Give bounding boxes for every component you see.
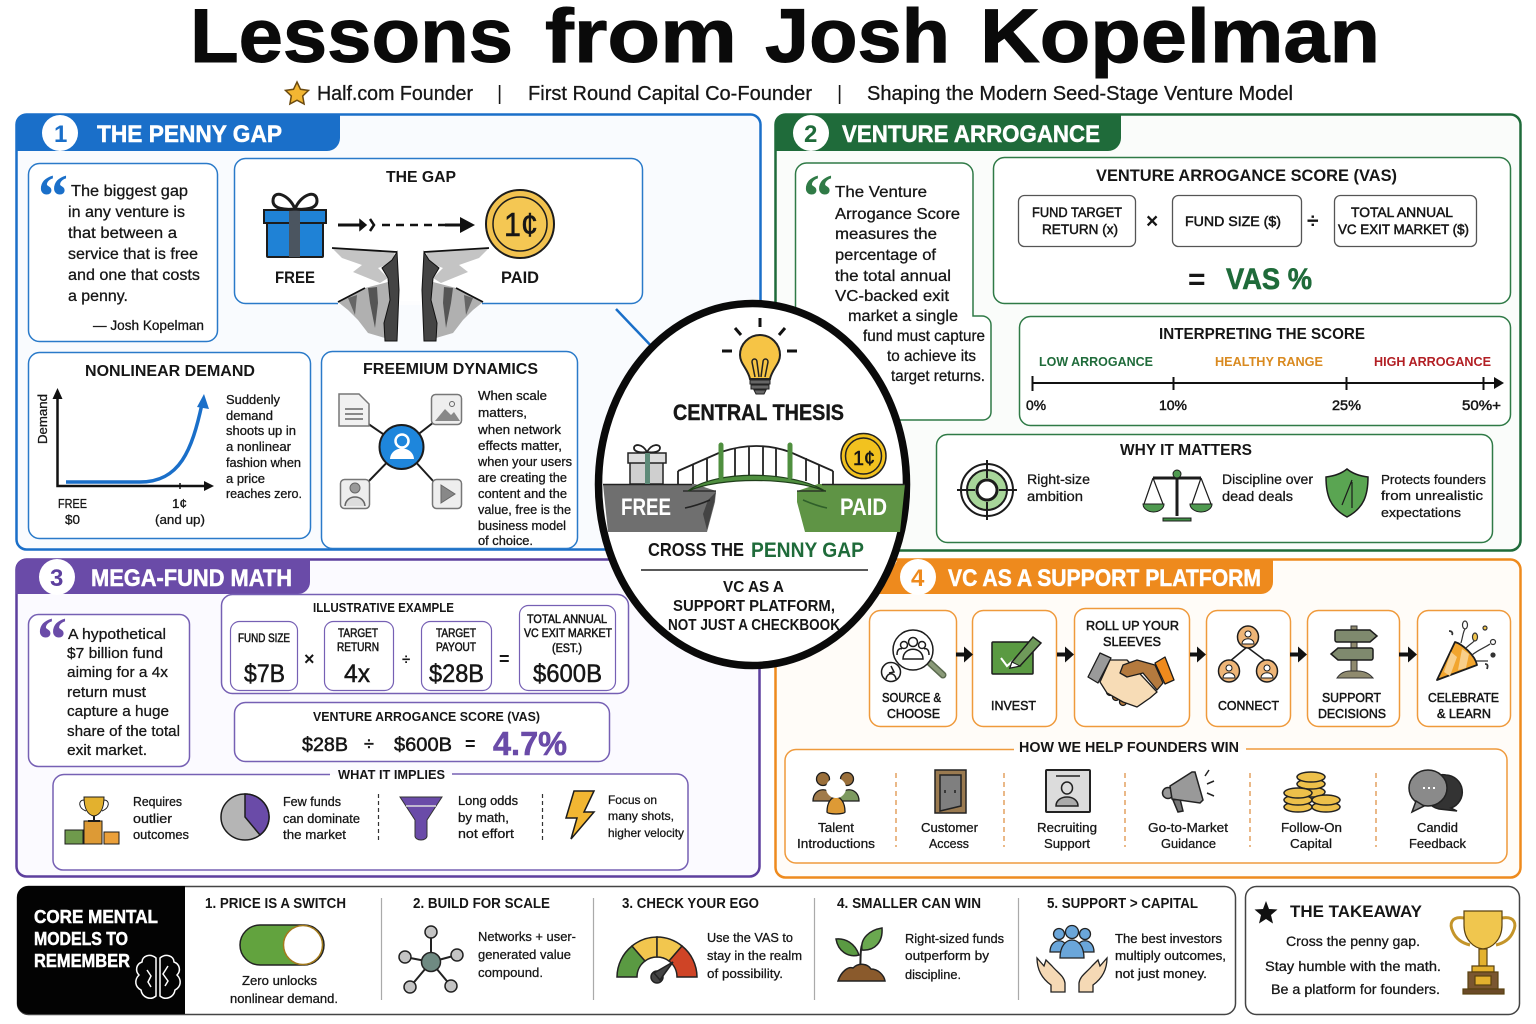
model 4: smaller can win: outperform by xyxy=(905,948,990,963)
panel: how we help founders win: Introductions xyxy=(797,836,876,851)
panel: the takeaway: THE TAKEAWAY xyxy=(1290,902,1423,921)
panel: illustrative example: TARGET xyxy=(436,628,476,640)
panel: nonlinear demand: a nonlinear xyxy=(226,440,291,454)
step: connect: CONNECT xyxy=(1218,698,1279,713)
quote: hypothetical fund: return must xyxy=(67,684,147,701)
icon: door xyxy=(935,770,966,813)
step: roll up your sleeves: ROLL UP YOUR xyxy=(1086,618,1179,633)
panel: VAS formula: RETURN (x) xyxy=(1042,222,1118,237)
panel: how we help founders win: Capital xyxy=(1290,836,1332,851)
panel: illustrative example: $28B xyxy=(429,660,484,688)
quote: hypothetical fund: share of the total xyxy=(67,723,180,740)
quote: biggest gap: in any venture is xyxy=(68,204,185,221)
heading: mega-fund math: MEGA-FUND MATH xyxy=(91,565,292,592)
diagram: network of content xyxy=(339,394,462,508)
model 4: smaller can win: 4. SMALLER CAN WIN xyxy=(837,896,981,912)
panel: VAS result: 4.7% xyxy=(493,725,567,762)
model 2: build for scale: 2. BUILD FOR SCALE xyxy=(413,896,550,912)
heading block: CORE MENTAL xyxy=(34,907,158,927)
panel: illustrative example: (EST.) xyxy=(552,643,582,655)
heading: vc as a support platform: 4 xyxy=(911,565,925,592)
quote: venture arrogance score: the total annual xyxy=(835,268,951,285)
arrows between steps xyxy=(956,646,1417,662)
model 1: price is a switch: 1. PRICE IS A SWITCH xyxy=(205,896,346,912)
step: roll up your sleeves: SLEEVES xyxy=(1103,634,1161,649)
scale axis xyxy=(1032,376,1504,391)
heading: venture arrogance: 2 xyxy=(804,121,817,148)
icon: talent group xyxy=(813,772,859,814)
model 4: smaller can win xyxy=(836,896,1004,982)
step: support decisions: DECISIONS xyxy=(1318,706,1386,721)
panel: illustrative example: TOTAL ANNUAL xyxy=(527,614,608,626)
quote: venture arrogance score: “ xyxy=(803,163,833,231)
panel: illustrative example: TARGET xyxy=(338,628,378,640)
model 3: check your ego: 3. CHECK YOUR EGO xyxy=(622,896,759,912)
panel: interpreting the score: LOW ARROGANCE xyxy=(1039,354,1153,369)
line chart: demand: 1¢ xyxy=(172,497,187,511)
panel: freemium dynamics: of choice. xyxy=(478,534,533,548)
illustration: broken cliffs xyxy=(332,248,489,341)
panel: central thesis: SUPPORT PLATFORM, xyxy=(673,598,835,615)
panel: illustrative example: $7B xyxy=(244,660,285,688)
model 5: support over capital xyxy=(1037,896,1226,992)
panel: nonlinear demand: a price xyxy=(226,472,265,486)
icon: star xyxy=(1254,901,1278,924)
panel: what it implies: Long odds xyxy=(458,794,518,808)
panel: VAS result: ÷ xyxy=(364,734,374,754)
model 2: build for scale xyxy=(399,896,576,993)
icon: coin xyxy=(486,190,554,258)
panel: why it matters: ambition xyxy=(1027,489,1083,504)
step: celebrate and learn xyxy=(1418,610,1510,726)
quote: biggest gap: that between a xyxy=(68,225,177,242)
step: invest xyxy=(972,610,1056,726)
step: celebrate and learn: & LEARN xyxy=(1437,706,1491,721)
panel: the gap: PAID xyxy=(501,269,539,287)
panel: what it implies: Requires xyxy=(133,795,182,809)
panel: interpreting the score: HIGH ARROGANCE xyxy=(1374,354,1491,369)
panel: interpreting the score xyxy=(1020,316,1510,426)
quote: venture arrogance score: percentage of xyxy=(835,247,937,264)
subtitle row: Half.com Founder xyxy=(317,83,473,105)
panel: how we help founders win: Guidance xyxy=(1161,836,1216,851)
heading: the penny gap xyxy=(16,114,340,151)
panel: what it implies: outlier xyxy=(133,812,172,826)
heading: the penny gap: 1 xyxy=(54,121,67,148)
step: source and choose: CHOOSE xyxy=(887,706,940,721)
panel: illustrative example: ILLUSTRATIVE EXAMPLE xyxy=(313,601,454,615)
panel: VAS result: $28B xyxy=(302,735,348,756)
panel: the penny gap xyxy=(16,114,760,550)
model 4: smaller can win: Right-sized funds xyxy=(905,931,1004,946)
panel: illustrative example: PAYOUT xyxy=(436,642,476,654)
panel: illustrative example: ÷ xyxy=(402,651,410,668)
quote: venture arrogance score: Arrogance Score xyxy=(835,206,960,223)
icon: people in hands xyxy=(1037,926,1107,992)
heading: the penny gap: THE PENNY GAP xyxy=(97,121,282,148)
heading block: REMEMBER xyxy=(34,951,130,971)
panel: how we help founders win: Go-to-Market xyxy=(1148,820,1228,835)
quote: hypothetical fund: “ xyxy=(37,606,67,674)
model 5: support over capital: multiply outcomes, xyxy=(1115,949,1226,963)
panel: what it implies: higher velocity xyxy=(608,826,684,840)
subtitle row: Shaping the Modern Seed-Stage Venture Model xyxy=(867,83,1293,105)
illustration: bridge over the gap: FREE xyxy=(621,494,671,521)
connector to central thesis xyxy=(616,309,655,350)
panel: core mental models xyxy=(17,886,1236,1014)
panel: why it matters xyxy=(936,434,1492,542)
quote continuation: venture arrogance score xyxy=(848,308,985,385)
panel: illustrative example: RETURN xyxy=(337,642,379,654)
panel: freemium dynamics: FREEMIUM DYNAMICS xyxy=(363,361,538,378)
panel: VAS result xyxy=(234,702,610,762)
panel: VAS formula xyxy=(994,158,1510,304)
illustration: bridge over the gap xyxy=(603,434,905,532)
icon: speech bubbles xyxy=(1409,770,1462,812)
panel: the takeaway: Stay humble with the math. xyxy=(1265,959,1441,974)
panel: interpreting the score: 10% xyxy=(1159,397,1187,413)
model 3: check your ego: stay in the realm xyxy=(707,948,802,963)
panel: VAS result: $600B xyxy=(394,735,452,756)
panel: VAS formula: FUND SIZE ($) xyxy=(1185,214,1281,229)
icon: scales xyxy=(1143,470,1212,521)
line chart: demand: Demand xyxy=(36,394,50,444)
panel: what it implies: Focus on xyxy=(608,793,657,807)
heading: vc as a support platform: VC AS A SUPPORT PLATFORM xyxy=(948,565,1261,592)
panel: illustrative example: $600B xyxy=(533,660,602,688)
left cliff xyxy=(332,248,399,341)
panel: freemium dynamics: business model xyxy=(478,519,566,533)
panel: illustrative example: × xyxy=(304,649,315,669)
heading: mega-fund math xyxy=(16,559,310,595)
panel: the takeaway xyxy=(1246,886,1520,1014)
panel: VAS formula: VC EXIT MARKET ($) xyxy=(1338,222,1469,237)
panel: VAS formula: VAS % xyxy=(1226,263,1312,296)
quote continuation: venture arrogance score: market a single xyxy=(848,308,958,325)
panel: VAS formula: × xyxy=(1146,210,1158,233)
subtitle row xyxy=(286,82,1293,105)
panel: nonlinear demand: Suddenly xyxy=(226,393,281,407)
panel: freemium dynamics xyxy=(322,352,578,548)
panel: why it matters: WHY IT MATTERS xyxy=(1120,442,1252,459)
subtitle row: | xyxy=(497,83,502,105)
step: support decisions xyxy=(1308,610,1400,726)
panel: what it implies: not effort xyxy=(458,827,515,841)
heading: mega-fund math: 3 xyxy=(50,565,63,592)
panel: why it matters: expectations xyxy=(1381,505,1462,520)
line chart: demand: $0 xyxy=(65,513,80,527)
panel: interpreting the score: 50%+ xyxy=(1462,397,1501,413)
step: invest: INVEST xyxy=(991,698,1036,713)
heading block xyxy=(17,886,185,1014)
panel: VAS formula: TOTAL ANNUAL xyxy=(1351,205,1454,220)
panel: what it implies: many shots, xyxy=(608,809,674,823)
quote: hypothetical fund: exit market. xyxy=(67,742,147,759)
quote: hypothetical fund: A hypothetical xyxy=(68,626,166,643)
right cliff xyxy=(422,248,489,341)
panel: nonlinear demand: shoots up in xyxy=(226,424,296,438)
panel: freemium dynamics: matters, xyxy=(478,406,527,420)
panel: central thesis: CROSS THE xyxy=(648,539,744,560)
step: source and choose: SOURCE & xyxy=(882,690,941,705)
icon: lightning bolt xyxy=(566,791,594,839)
gift and coin xyxy=(628,434,886,484)
panel: VAS formula: VENTURE ARROGANCE SCORE (VAS) xyxy=(1096,166,1397,185)
panel: interpreting the score: HEALTHY RANGE xyxy=(1215,354,1323,369)
model 2: build for scale: compound. xyxy=(478,965,543,980)
quote continuation: venture arrogance score: fund must capture xyxy=(863,328,985,345)
panel: the gap: THE GAP xyxy=(386,169,456,186)
panel: how we help founders win: Feedback xyxy=(1409,836,1466,851)
quote: hypothetical fund: $7 billion fund xyxy=(67,645,163,662)
panel: how we help founders win: Candid xyxy=(1417,820,1458,835)
line chart: demand xyxy=(36,388,214,527)
panel: nonlinear demand: demand xyxy=(226,409,273,423)
panel: how we help founders win: HOW WE HELP FOUNDERS WIN xyxy=(1019,740,1239,756)
heading: venture arrogance: VENTURE ARROGANCE xyxy=(842,121,1100,148)
model 3: check your ego: Use the VAS to xyxy=(707,930,793,945)
quote continuation: venture arrogance score: target returns. xyxy=(891,368,985,385)
arrow: free to paid xyxy=(338,217,475,233)
quote: biggest gap: — Josh Kopelman xyxy=(93,317,204,333)
heading: vc as a support platform xyxy=(878,559,1273,595)
quote continuation: venture arrogance score: to achieve its xyxy=(887,348,976,365)
panel: illustrative example: 4x xyxy=(344,660,370,688)
quote: biggest gap: and one that costs xyxy=(68,267,200,284)
icon: coin: 1¢ xyxy=(504,206,538,243)
model 5: support over capital: 5. SUPPORT > CAPITAL xyxy=(1047,896,1198,912)
quote: biggest gap: service that is free xyxy=(68,246,198,263)
step: support decisions: SUPPORT xyxy=(1322,690,1381,705)
icon: gift xyxy=(264,194,326,257)
panel: freemium dynamics: are creating the xyxy=(478,471,567,485)
gift and coin: 1¢ xyxy=(853,448,875,470)
line chart: demand: FREE xyxy=(58,497,87,511)
panel: why it matters: from unrealistic xyxy=(1381,488,1484,503)
panel: why it matters: Discipline over xyxy=(1222,472,1314,487)
panel: central thesis: VC AS A xyxy=(723,579,784,596)
panel: what it implies: the market xyxy=(283,828,347,842)
icon: handshake xyxy=(1088,653,1174,707)
subtitle row: | xyxy=(837,83,842,105)
panel: freemium dynamics: content and the xyxy=(478,487,567,501)
panel: VAS result: VENTURE ARROGANCE SCORE (VAS) xyxy=(313,709,540,724)
panel: freemium dynamics: When scale xyxy=(478,389,547,403)
icon: trophy podium xyxy=(65,797,119,844)
panel: interpreting the score: 25% xyxy=(1332,397,1361,413)
quote: biggest gap xyxy=(28,163,218,342)
panel: the gap xyxy=(234,158,642,304)
icon: gauge xyxy=(617,937,697,983)
panel: illustrative example: FUND SIZE xyxy=(238,633,290,645)
heading: venture arrogance xyxy=(775,114,1121,151)
model 3: check your ego: of possibility. xyxy=(707,966,783,981)
panel: VAS formula: = xyxy=(1188,263,1206,296)
panel: what it implies: by math, xyxy=(458,811,509,825)
model 5: support over capital: The best investors xyxy=(1115,932,1222,946)
panel: the takeaway: Be a platform for founders. xyxy=(1271,982,1440,997)
panel: freemium dynamics: effects matter, xyxy=(478,439,562,453)
subtitle row: First Round Capital Co-Founder xyxy=(528,83,812,105)
panel: how we help founders win: Customer xyxy=(921,820,979,835)
icon: funnel xyxy=(400,797,442,840)
icon: shield xyxy=(1326,469,1368,517)
panel: illustrative example: VC EXIT MARKET xyxy=(524,628,612,640)
panel: VAS formula: FUND TARGET xyxy=(1032,205,1122,220)
quote: venture arrogance score: The Venture xyxy=(835,184,927,201)
line chart: demand: (and up) xyxy=(155,513,205,527)
quote: biggest gap: “ xyxy=(38,163,68,231)
panel: what it implies: outcomes xyxy=(133,828,189,842)
icon: target xyxy=(957,460,1017,520)
panel: how we help founders win: Talent xyxy=(818,820,854,835)
step: celebrate and learn: CELEBRATE xyxy=(1428,690,1499,705)
step: roll up your sleeves xyxy=(1074,608,1190,726)
panel: venture arrogance xyxy=(775,114,1520,550)
panel: nonlinear demand: NONLINEAR DEMAND xyxy=(85,363,255,380)
icon: recruiting profile xyxy=(1046,770,1090,812)
panel: freemium dynamics: when network xyxy=(477,423,562,437)
quote: hypothetical fund: aiming for a 4x xyxy=(67,664,169,681)
panel: how we help founders win: Follow-On xyxy=(1281,820,1342,835)
panel: freemium dynamics: value, free is the xyxy=(478,503,571,517)
model 4: smaller can win: discipline. xyxy=(905,967,961,982)
panel: interpreting the score: INTERPRETING THE SCORE xyxy=(1159,326,1365,343)
panel: the gap: FREE xyxy=(275,269,315,287)
quote: venture arrogance score xyxy=(796,163,991,420)
quote: venture arrogance score: VC-backed exit xyxy=(835,288,950,305)
panel: illustrative example: = xyxy=(499,649,510,669)
step: source and choose xyxy=(870,610,956,726)
panel: VAS formula: ÷ xyxy=(1307,210,1319,233)
quote: biggest gap: a penny. xyxy=(68,288,128,305)
panel: how we help founders win: Recruiting xyxy=(1037,820,1097,835)
heading block: MODELS TO xyxy=(34,929,128,949)
panel: nonlinear demand: fashion when xyxy=(226,456,301,470)
icon: stack of coins xyxy=(1284,772,1340,812)
model 1: price is a switch: Zero unlocks xyxy=(242,973,318,988)
step: connect xyxy=(1206,610,1290,726)
model 3: check your ego xyxy=(617,896,802,983)
quote: hypothetical fund: capture a huge xyxy=(67,703,169,720)
quote: biggest gap: The biggest gap xyxy=(71,183,188,200)
panel: vc as a support platform xyxy=(776,559,1520,878)
panel: what it implies xyxy=(53,767,688,870)
model 1: price is a switch: nonlinear demand. xyxy=(230,991,338,1006)
panel: why it matters: Protects founders xyxy=(1381,472,1487,487)
icon: sprout xyxy=(836,928,885,981)
panel: why it matters: Right-size xyxy=(1027,472,1090,487)
panel: central thesis: NOT JUST A CHECKBOOK xyxy=(668,617,841,634)
icon: network xyxy=(399,926,463,993)
illustration: bridge over the gap: PAID xyxy=(840,494,887,521)
icon: pie chart xyxy=(221,794,269,840)
panel: freemium dynamics: when your users xyxy=(477,455,572,469)
icon: trophy xyxy=(1451,911,1515,994)
model 1: price is a switch xyxy=(205,896,346,1006)
panel: interpreting the score: 0% xyxy=(1026,397,1046,413)
panel: what it implies: Few funds xyxy=(283,795,341,809)
model 2: build for scale: generated value xyxy=(478,947,571,962)
panel: VAS result: = xyxy=(465,734,476,754)
model 5: support over capital: not just money. xyxy=(1115,967,1207,981)
quote: venture arrogance score: measures the xyxy=(835,226,937,243)
icon: megaphone xyxy=(1162,770,1214,812)
panel: how we help founders win: Support xyxy=(1044,836,1090,851)
panel: what it implies: WHAT IT IMPLIES xyxy=(338,767,445,782)
panel: central thesis: PENNY GAP xyxy=(751,538,864,562)
icon: brain xyxy=(136,955,180,998)
panel: how we help founders win: Access xyxy=(929,836,969,851)
panel: how we help founders win xyxy=(785,740,1507,863)
icon: light bulb xyxy=(722,318,797,394)
panel: what it implies: can dominate xyxy=(283,812,360,826)
panel: the takeaway: Cross the penny gap. xyxy=(1286,934,1420,949)
panel: illustrative example xyxy=(222,594,628,694)
panel: central thesis xyxy=(598,304,906,666)
panel: nonlinear demand xyxy=(28,352,310,538)
panel: mega-fund math xyxy=(16,559,760,876)
quote: hypothetical fund xyxy=(28,606,190,766)
panel: central thesis: CENTRAL THESIS xyxy=(673,400,844,425)
panel: nonlinear demand: reaches zero. xyxy=(226,487,302,501)
panel: why it matters: dead deals xyxy=(1222,489,1293,504)
model 2: build for scale: Networks + user- xyxy=(478,929,576,944)
icon: star xyxy=(286,82,308,104)
